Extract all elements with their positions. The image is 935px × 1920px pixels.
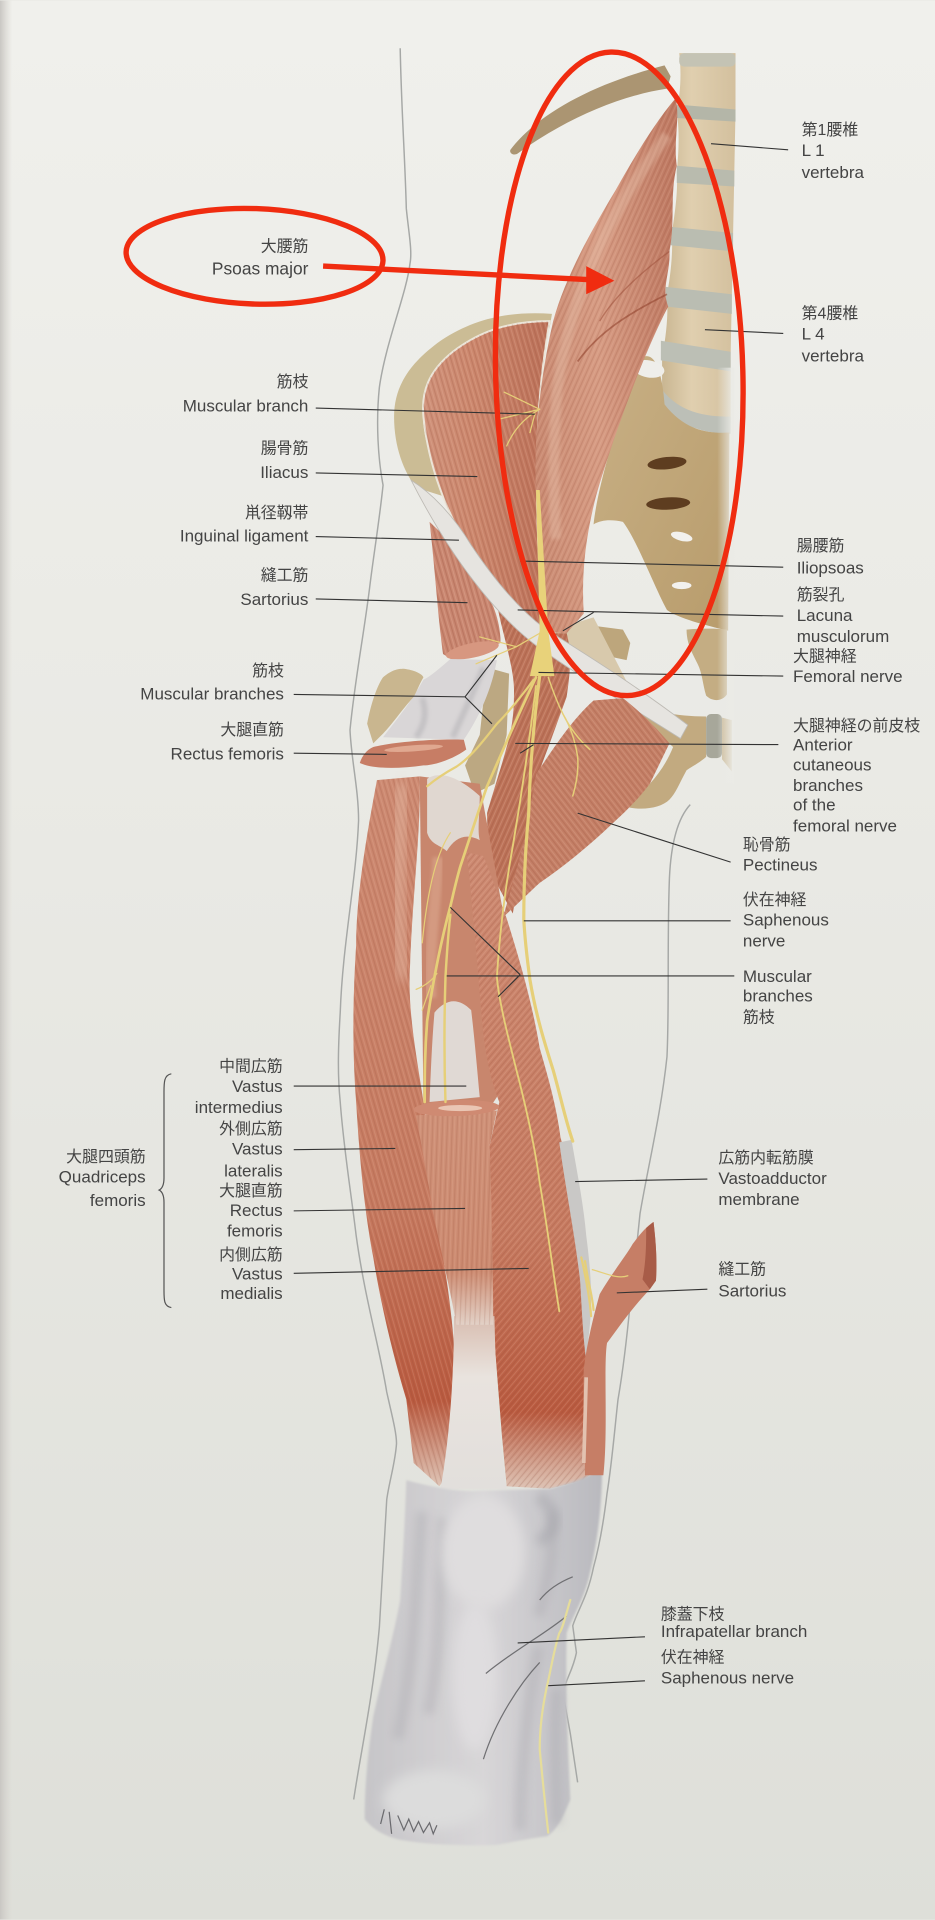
labels: right column: 第1腰椎 <box>802 121 858 139</box>
labels: left column: Rectus femoris <box>171 744 284 763</box>
muscle: rectus femoris tendon <box>441 1316 507 1489</box>
labels: right column <box>661 121 920 1687</box>
labels: left column: Sartorius <box>240 590 308 609</box>
ligament: joint capsule <box>383 659 497 740</box>
labels: quadriceps group: Vastus <box>232 1077 283 1096</box>
labels: quadriceps group <box>59 1057 283 1303</box>
labels: quadriceps group: 大腿四頭筋 <box>66 1148 146 1166</box>
labels: right column: Saphenous nerve <box>661 1668 794 1687</box>
labels: right column: branches <box>793 776 863 795</box>
labels: quadriceps group: 中間広筋 <box>219 1057 283 1075</box>
labels: quadriceps group: Quadriceps <box>59 1168 146 1187</box>
labels: quadriceps group: lateralis <box>224 1162 283 1181</box>
muscle: vastus lateralis <box>353 776 456 1486</box>
labels: right column: Lacuna <box>797 606 853 625</box>
body outline: thin grey contour lines <box>338 48 690 1800</box>
labels: left column: 大腿直筋 <box>220 721 284 739</box>
labels: quadriceps group: Vastus <box>232 1140 283 1159</box>
labels: right column: musculorum <box>797 627 889 646</box>
bone: coccyx <box>687 629 727 700</box>
bone: ilium <box>394 313 552 496</box>
labels: quadriceps group: femoris <box>90 1191 146 1210</box>
labels: left column: Inguinal ligament <box>180 526 309 545</box>
labels: quadriceps group: femoris <box>227 1222 283 1241</box>
labels: right column: membrane <box>718 1190 800 1209</box>
labels: right column: Iliopsoas <box>797 558 864 577</box>
labels: quadriceps group: 外側広筋 <box>219 1120 283 1138</box>
labels: right column: of the <box>793 796 836 815</box>
labels: right column: L 4 <box>802 325 825 344</box>
labels: quadriceps group: medialis <box>220 1284 283 1303</box>
bracket: quadriceps <box>159 1074 171 1308</box>
muscle: rectus femoris cut end <box>360 739 466 768</box>
tissue: tan tissue behind capsule <box>465 668 509 794</box>
labels: right column: 恥骨筋 <box>743 836 791 854</box>
labels: left column: 筋枝 <box>252 662 284 680</box>
muscle: psoas major <box>536 98 677 633</box>
labels: right column: branches <box>743 987 813 1006</box>
labels: left column: Muscular branches <box>140 684 284 703</box>
labels: right column: 筋裂孔 <box>797 586 844 604</box>
labels: left column: Iliacus <box>260 463 308 482</box>
bone: lumbar spine <box>661 53 736 434</box>
membrane: knee fascia <box>365 1468 602 1845</box>
muscle: vastus intermedius <box>427 775 480 1102</box>
labels: right column: 腸腰筋 <box>797 537 844 555</box>
labels: quadriceps group: Vastus <box>232 1264 283 1283</box>
labels: left column: Muscular branch <box>183 397 308 416</box>
labels: quadriceps group: intermedius <box>195 1098 283 1117</box>
labels: right column: Femoral nerve <box>793 667 903 686</box>
membrane: vastoadductor membrane <box>559 1140 591 1360</box>
labels: left column: 腸骨筋 <box>261 439 308 457</box>
labels: right column: Anterior <box>793 736 853 755</box>
bone: pubis <box>553 617 732 809</box>
labels: right column: 筋枝 <box>743 1008 775 1026</box>
labels: right column: 膝蓋下枝 <box>661 1606 725 1624</box>
labels: right column: 伏在神経 <box>743 891 807 909</box>
muscle: sartorius lower <box>583 1222 656 1475</box>
bone: rib <box>510 65 671 154</box>
labels: right column: cutaneous <box>793 755 871 774</box>
labels: right column: Muscular <box>743 967 812 986</box>
labels: right column: vertebra <box>802 347 865 366</box>
arrow: from label to psoas major <box>323 266 614 294</box>
labels: right column: nerve <box>743 932 785 951</box>
labels: left column: 筋枝 <box>277 373 309 391</box>
muscle: pectineus <box>503 698 669 917</box>
ligament: inguinal ligament <box>411 480 688 738</box>
signature <box>381 1809 437 1834</box>
muscle: sartorius upper <box>430 522 501 663</box>
labels: quadriceps group: 内側広筋 <box>219 1246 283 1264</box>
callout: red ellipse around psoas muscle <box>487 49 751 699</box>
bone: sacrum <box>594 356 729 631</box>
nerve: saphenous nerve at knee <box>540 1600 570 1833</box>
nerve: femoral nerve and branches <box>416 392 628 1316</box>
labels: left column: 鼡径靱帯 <box>245 504 309 522</box>
labels: quadriceps group: 大腿直筋 <box>219 1182 283 1200</box>
labels: right column: 縫工筋 <box>718 1261 766 1279</box>
bone: femur trochanter <box>367 669 423 743</box>
labels: left column: 大腰筋 <box>261 237 308 255</box>
spine fade edge <box>717 368 734 784</box>
labels: left column <box>140 237 309 763</box>
labels: right column: 伏在神経 <box>661 1648 725 1666</box>
labels: right column: Sartorius <box>718 1282 786 1301</box>
labels: right column: L 1 <box>802 141 825 160</box>
labels: right column: Pectineus <box>743 856 818 875</box>
muscle: deep iliopsoas below ligament <box>487 604 570 913</box>
panel: anatomy illustration <box>353 53 736 1845</box>
labels: left column: 縫工筋 <box>261 567 308 585</box>
labels: quadriceps group: Rectus <box>230 1201 283 1220</box>
labels: right column: Infrapatellar branch <box>661 1622 807 1641</box>
callout: red ellipse around Psoas major label <box>124 204 385 308</box>
muscle: vastus medialis <box>466 852 600 1489</box>
labels: right column: 広筋内転筋膜 <box>718 1149 814 1167</box>
labels: left column: Psoas major <box>212 259 309 279</box>
muscle: central thigh tissue <box>420 776 526 1108</box>
muscle: rectus femoris lower <box>413 1099 500 1325</box>
labels: right column: femoral nerve <box>793 816 897 835</box>
labels: right column: 第4腰椎 <box>802 305 858 323</box>
labels: right column: vertebra <box>802 163 865 182</box>
labels: right column: Vastoadductor <box>718 1169 827 1188</box>
leader lines <box>294 144 788 1686</box>
muscle: iliacus <box>423 321 549 634</box>
labels: right column: 大腿神経 <box>793 647 857 665</box>
labels: right column: Saphenous <box>743 911 829 930</box>
labels: right column: 大腿神経の前皮枝 <box>793 717 920 735</box>
